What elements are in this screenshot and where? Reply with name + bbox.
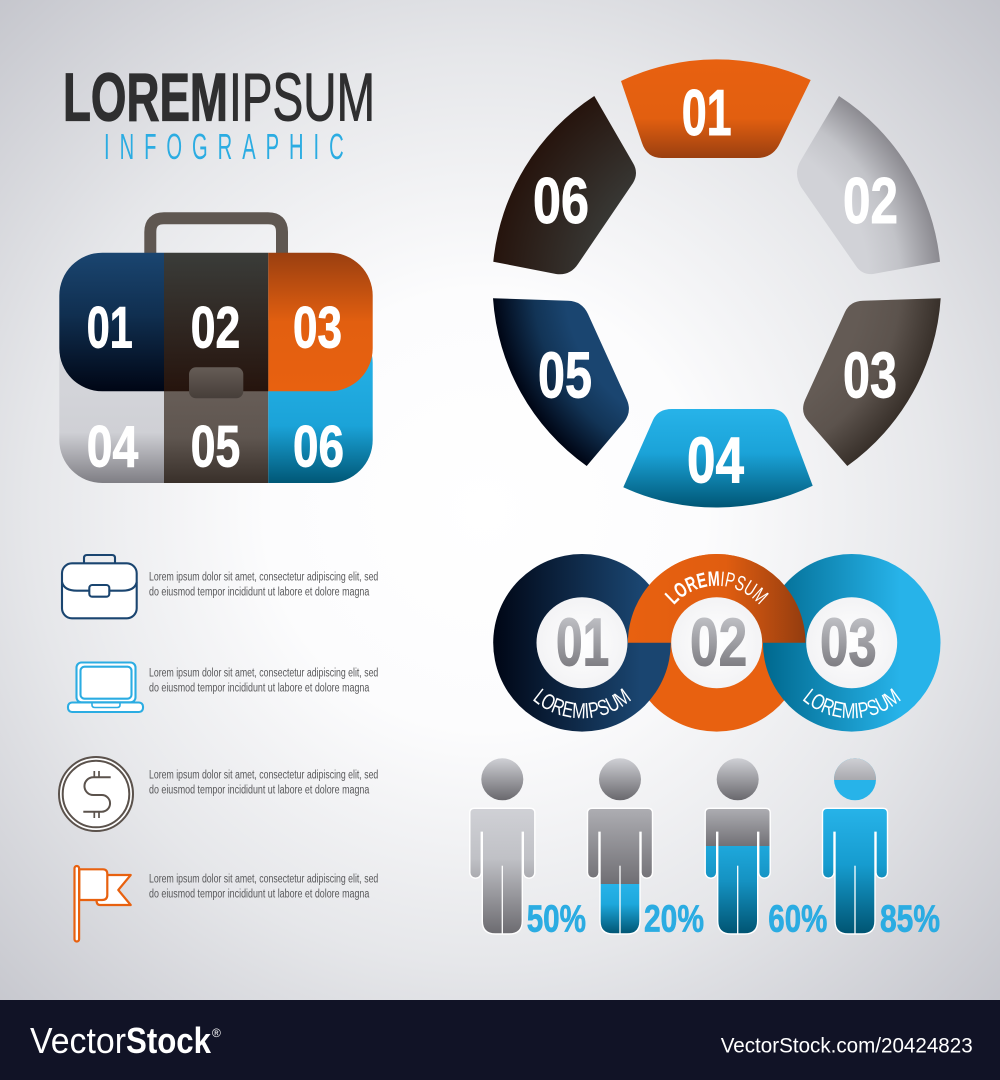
person 50%: 50% [527,899,586,941]
icon: laptop [68,662,143,712]
circle 02 upper ring [628,554,806,643]
circle 02 centre [671,597,762,688]
briefcase numbers [87,296,344,480]
icon: flag [74,866,131,942]
footer logo: Vector [30,1020,126,1061]
people percentage chart [470,758,940,941]
text block 3 [149,769,378,797]
person 60% [705,758,827,941]
briefcase numbers: 01 [87,296,133,361]
heading: lorem ipsum: LOREM [63,60,228,136]
subheading: infographic: INFOGRAPHIC [104,128,344,168]
interlocking circles [493,554,940,732]
circle 01 curved label: LOREMIPSUM [533,688,631,718]
text block 1: do eiusmod tempor incididunt ut labore et dolore magna [149,587,370,599]
footer logo: ® [212,1026,221,1040]
person 20%: 20% [644,899,704,941]
briefcase lower panels [59,320,373,485]
segment 01: 01 [682,76,732,149]
icon: dollar coin [59,757,133,831]
circle 02 curved label: LOREMIPSUM [664,571,769,604]
footer logo: Stock [126,1020,212,1061]
footer image id: VectorStock.com/20424823 [721,1035,973,1058]
circle 01 ring [493,554,671,732]
briefcase clasp [189,367,243,398]
segment 02: 02 [843,164,898,237]
person 20% [587,758,704,941]
segment 04 [623,409,813,508]
segment 03: 03 [843,338,897,411]
segment 02 [797,96,940,274]
circle 01 centre: 01 [556,605,609,681]
heading: lorem ipsum: IPSUM [229,60,375,136]
text block 1 [149,572,378,599]
segment 05 [493,298,629,466]
briefcase chart [59,218,373,485]
circle 03 centre: 03 [820,605,877,681]
ring chart of six segments [493,59,941,508]
circle 03 ring [763,554,940,732]
person 85%: 85% [880,899,940,941]
briefcase handle [150,218,282,256]
text block 2: do eiusmod tempor incididunt ut labore et dolore magna [149,683,370,695]
text block 2 [149,668,378,695]
text block 3: Lorem ipsum dolor sit amet, consectetur adipiscing elit, sed [149,769,378,781]
person 85% [822,758,940,941]
briefcase numbers: 05 [191,415,240,480]
text block 3: do eiusmod tempor incididunt ut labore et dolore magna [149,785,370,797]
person 50% [470,758,586,941]
person 60%: 60% [768,899,827,941]
briefcase numbers: 04 [87,415,138,480]
circle 02 lower ring [628,554,806,732]
briefcase upper panels [59,252,373,392]
segment 04: 04 [687,423,744,496]
briefcase numbers: 03 [293,296,342,361]
text block 2: Lorem ipsum dolor sit amet, consectetur adipiscing elit, sed [149,668,378,680]
segment 06: 06 [533,164,589,237]
text block 4 [149,873,378,901]
text block 4: Lorem ipsum dolor sit amet, consectetur adipiscing elit, sed [149,873,378,885]
segment 06 [493,96,636,274]
circle 01 centre [536,597,628,688]
circle 03 curved label: LOREMIPSUM [802,688,901,718]
segment 03 [803,298,941,466]
circle 02 centre: 02 [690,605,747,681]
segment 05: 05 [538,338,592,411]
footer bar [0,1000,1000,1080]
footer logo [30,1020,221,1061]
icon: briefcase [62,555,137,618]
circle 03 centre [806,597,897,688]
text block 1: Lorem ipsum dolor sit amet, consectetur adipiscing elit, sed [149,572,378,584]
briefcase numbers: 02 [191,296,240,361]
text block 4: do eiusmod tempor incididunt ut labore et dolore magna [149,889,370,901]
icon list [59,555,378,942]
briefcase numbers: 06 [293,415,344,480]
segment 01 [621,59,811,158]
title [63,60,375,168]
